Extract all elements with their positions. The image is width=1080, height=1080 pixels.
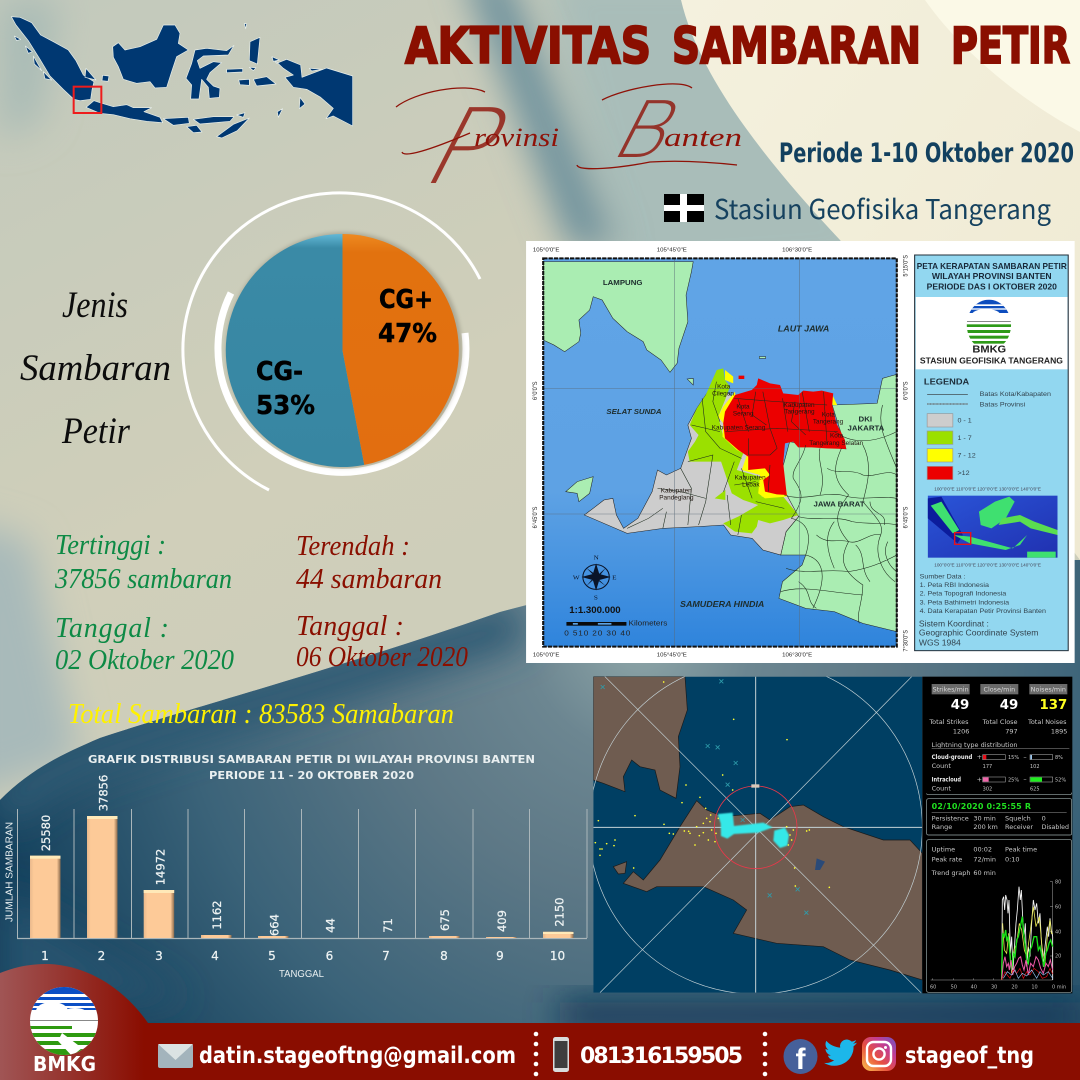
- radar readout panel: 302: [983, 786, 992, 792]
- district labels: Cilegon: [712, 391, 734, 398]
- radar readout panel: Range: [932, 823, 952, 831]
- legend items: >12: [957, 470, 970, 477]
- radar readout panel: 00:02: [973, 845, 992, 853]
- scale bar: [564, 605, 667, 638]
- radar map: [589, 661, 922, 994]
- legend items: 1 - 7: [957, 435, 972, 442]
- heading: Jenis Sambaran Petir: [20, 285, 171, 452]
- axis title: tanggal: TANGGAL: [279, 968, 324, 980]
- title: SAMBARAN: [672, 17, 921, 75]
- radar readout panel: –: [1023, 753, 1027, 761]
- chart title: GRAFIK DISTRIBUSI SAMBARAN PETIR DI WILAYAH PROVINSI BANTEN: [88, 754, 535, 766]
- trend graph: 50: [951, 984, 957, 990]
- map area: [543, 258, 897, 647]
- panel: legend sidebar: BMKG: [972, 344, 1006, 356]
- icon: instagram: [862, 1037, 896, 1071]
- land masses: [593, 677, 922, 980]
- icon: compass rose: [573, 555, 617, 602]
- title: AKTIVITAS: [405, 17, 651, 75]
- radar readout panel: Trend graph: [931, 869, 970, 877]
- radar readout panel: 02/10/2020 0:25:55 R: [932, 802, 1031, 811]
- coordinate labels: 105°0'0"E: [533, 248, 560, 254]
- heading: Jenis Sambaran Petir: Petir: [61, 411, 131, 452]
- radar readout panel: [922, 677, 1072, 993]
- x axis labels: [41, 949, 565, 963]
- radar readout panel: 52%: [1055, 777, 1066, 783]
- radar readout panel: 15%: [1008, 755, 1019, 761]
- panel: density map: [526, 241, 1075, 663]
- legend title: WILAYAH PROVINSI BANTEN: [932, 271, 1052, 281]
- slice: CG- 53%: [226, 234, 364, 467]
- icon: compass rose: E: [612, 575, 617, 581]
- island: Sulawesi: [186, 45, 234, 99]
- icon: BMKG logo: [30, 987, 98, 1056]
- district labels: Serang: [733, 411, 754, 418]
- radar readout panel: 177: [983, 764, 992, 770]
- stats: lowest: 06 Oktober 2020: [296, 642, 468, 673]
- scale bar: 0 510 20 30 40: [564, 629, 631, 638]
- icon: facebook: [784, 1039, 818, 1076]
- bar values: 14972: [154, 849, 168, 885]
- data sources: Sistem Koordinat :: [919, 619, 989, 628]
- x axis labels: 8: [440, 949, 448, 963]
- bar values: 37856: [96, 775, 110, 811]
- island: Java: [86, 101, 163, 123]
- x axis labels: 5: [268, 949, 276, 963]
- trend graph: 20: [1055, 954, 1061, 960]
- stats: highest: Tanggal :: [55, 613, 169, 644]
- trend graph: 40: [971, 984, 977, 990]
- sea and region labels: DKI: [859, 415, 872, 424]
- radar readout panel: Count: [932, 762, 951, 770]
- slice: CG+ 47%: [342, 234, 459, 465]
- social handle: stageof_tng: [905, 1043, 1034, 1069]
- footer bar: [0, 964, 1080, 1080]
- radar readout panel: 0:10: [1005, 856, 1020, 864]
- region: Banten low density: [584, 382, 799, 555]
- bar values: 44: [324, 918, 338, 933]
- icon: station flag: [664, 194, 704, 222]
- trend graph: 60: [1055, 904, 1061, 910]
- slice: CG+ 47%: CG+: [379, 285, 433, 315]
- coordinate labels: 105°0'0"E: [533, 653, 560, 659]
- legend items: LEGENDA: [924, 377, 970, 386]
- sea and region labels: LAMPUNG: [603, 278, 643, 287]
- stats: lowest: Terendah :: [296, 531, 410, 562]
- district labels: [659, 384, 864, 502]
- panel: legend sidebar: STASIUN GEOFISIKA TANGERANG: [920, 356, 1063, 366]
- data sources: [919, 574, 1046, 647]
- subtitle: Provinsi Banten: B: [598, 85, 696, 176]
- island: Kalimantan: [113, 25, 188, 88]
- subtitle: Provinsi Banten: rovinsi: [474, 123, 559, 152]
- inset map: 100°0'0"E 110°0'0"E 120°0'0"E 130°0'0"E 140°0'0"E: [934, 562, 1041, 567]
- decorative rings: [183, 193, 480, 490]
- icon: compass rose: W: [573, 575, 580, 581]
- district labels: Kota: [717, 384, 731, 390]
- radar readout panel: +: [977, 775, 982, 783]
- legend items: 0 - 1: [957, 418, 972, 425]
- pie chart: [183, 193, 480, 490]
- radar readout panel: Count: [932, 784, 951, 792]
- data sources: 3. Peta Bathimetri Indonesia: [920, 600, 1009, 607]
- radar readout panel: Total Noises: [1027, 718, 1067, 726]
- coordinate labels: 7°30'0"S: [903, 630, 910, 652]
- radar readout panel: 8%: [1055, 755, 1063, 761]
- heading: Jenis Sambaran Petir: Jenis: [62, 285, 128, 326]
- slice: CG- 53%: 53%: [256, 391, 315, 421]
- x axis labels: 6: [326, 949, 333, 963]
- coordinate labels: 6°0'0"S: [903, 381, 910, 400]
- title: [405, 17, 1070, 75]
- trend graph: 60: [930, 984, 936, 990]
- chart title: PERIODE 11 - 20 OKTOBER 2020: [209, 770, 414, 782]
- strike cluster: intracloud: [718, 813, 789, 848]
- bar values: 675: [438, 909, 452, 931]
- district labels: Kota: [830, 433, 844, 440]
- trend graph: 80: [1055, 879, 1061, 885]
- bar values: 409: [495, 910, 509, 932]
- radar readout panel: Peak time: [1005, 845, 1037, 853]
- icon: BMKG logo small: [966, 300, 1011, 344]
- district labels: Kota: [822, 412, 836, 418]
- radar readout panel: 625: [1030, 786, 1040, 792]
- district labels: Tangerang: [813, 419, 844, 426]
- slice: CG+ 47%: 47%: [378, 319, 437, 349]
- coordinate labels: 6°0'0"S: [533, 381, 539, 400]
- radar readout panel: 102: [1030, 764, 1040, 770]
- legend title: PERIODE DAS I OKTOBER 2020: [927, 282, 1057, 291]
- legend items: Batas Kota/Kabapaten: [980, 391, 1051, 398]
- bar values: [39, 775, 566, 936]
- islands: [566, 357, 766, 502]
- radar readout panel: 49: [951, 698, 969, 713]
- radar readout panel: +: [977, 753, 982, 761]
- x axis labels: 7: [382, 949, 390, 963]
- grid: [543, 258, 897, 647]
- legend items: Batas Provinsi: [980, 402, 1026, 409]
- legend title: [917, 261, 1067, 291]
- district labels: Kabupaten: [735, 475, 766, 481]
- stats: highest: 02 Oktober 2020: [55, 645, 234, 676]
- bar values: 1162: [210, 900, 224, 930]
- icon: Indonesia locator map: [11, 17, 353, 138]
- stats: highest: [54, 530, 234, 676]
- phone number: 081316159505: [580, 1044, 743, 1069]
- chart title: [88, 754, 535, 782]
- district labels: Kabupaten: [784, 402, 815, 409]
- sea and region labels: LAUT JAWA: [778, 324, 829, 334]
- x axis labels: 2: [98, 949, 105, 963]
- email: datin.stageoftng@gmail.com: [199, 1043, 516, 1069]
- legend items: 7 - 12: [957, 453, 976, 459]
- x axis labels: 4: [211, 949, 219, 963]
- data sources: 4. Data Kerapatan Petir Provinsi Banten: [920, 608, 1046, 615]
- district labels: Kota: [736, 404, 750, 410]
- trend graph: 10: [1031, 984, 1038, 990]
- district labels: Kabupaten Serang: [712, 425, 766, 432]
- inset map: 100°0'0"E 110°0'0"E 120°0'0"E 130°0'0"E 140°0'0"E: [934, 486, 1041, 491]
- radar readout panel: 137: [1040, 698, 1067, 713]
- icon: envelope: [158, 1044, 193, 1068]
- slice: CG- 53%: CG-: [256, 357, 303, 387]
- island: Sumatra: [11, 17, 94, 101]
- region: density 7-12: [718, 370, 837, 498]
- scale bar: Kilometers: [629, 619, 667, 628]
- bars: [30, 816, 574, 938]
- island: Papua: [272, 57, 353, 126]
- region: Lampung: [543, 262, 693, 372]
- trend graph: 30: [991, 984, 997, 990]
- radar readout panel: Peak rate: [932, 856, 962, 864]
- separator dots: [534, 1032, 767, 1076]
- radar readout panel: Lightning type distribution: [932, 741, 1018, 749]
- bar values: 71: [381, 918, 395, 933]
- type distribution bars: [983, 755, 1053, 782]
- subtitle: Provinsi Banten: anten: [664, 123, 742, 152]
- radar readout panel: Persistence: [932, 814, 969, 822]
- radar readout panel: 25%: [1008, 777, 1019, 783]
- radar readout panel: Noises/min: [1031, 686, 1066, 694]
- radar readout panel: Cloud-ground: [932, 753, 973, 761]
- radar readout panel: Total Close: [982, 718, 1018, 726]
- radar readout panel: 72/min: [973, 856, 996, 864]
- region: Jawa Barat: [779, 374, 897, 632]
- sea and region labels: JAWA BARAT: [814, 500, 865, 509]
- x axis labels: 3: [155, 949, 163, 963]
- heading: Jenis Sambaran Petir: Sambaran: [20, 348, 171, 389]
- radar readout panel: 30 min: [973, 814, 996, 822]
- radar readout panel: 1206: [953, 728, 969, 736]
- sea and region labels: SELAT SUNDA: [606, 407, 662, 416]
- panel: legend sidebar: [915, 255, 1068, 651]
- stats: highest: 37856 sambaran: [54, 564, 232, 595]
- scale bar: 1:1.300.000: [569, 605, 621, 615]
- strike points: cloud-ground: [594, 681, 830, 888]
- district labels: Tangerang Selatan: [809, 440, 864, 447]
- panel: lightning radar: [589, 661, 1072, 994]
- data sources: Geographic Coordinate System: [919, 628, 1038, 638]
- district labels: Lebak: [742, 482, 761, 489]
- gridlines: [17, 809, 587, 938]
- stats: lowest: [296, 531, 468, 673]
- legend title: PETA KERAPATAN SAMBARAN PETIR: [917, 261, 1067, 271]
- data sources: 2. Peta Topografi Indonesia: [920, 591, 1006, 598]
- stats: lowest: 44 sambaran: [296, 564, 442, 595]
- data sources: WGS 1984: [919, 638, 961, 647]
- sea and region labels: JAKARTA: [847, 424, 885, 432]
- axis title: jumlah sambaran: JUMLAH SAMBARAN: [4, 822, 16, 922]
- sea and region labels: [603, 278, 885, 609]
- coordinate labels: 6°45'0"S: [533, 507, 539, 528]
- coordinate labels: 106°30'0"E: [782, 653, 812, 659]
- x axis labels: 1: [41, 949, 49, 963]
- radar readout panel: Uptime: [932, 845, 955, 853]
- radar readout panel: 49: [1000, 698, 1018, 713]
- bar values: 2150: [552, 897, 566, 927]
- icon: facebook: f: [796, 1043, 806, 1076]
- radar readout panel: 60 min: [973, 869, 996, 877]
- marker: Banten red box: [74, 87, 101, 113]
- radar readout panel: Receiver: [1005, 823, 1033, 831]
- radar readout panel: 1895: [1051, 728, 1067, 736]
- coordinate labels: 5°15'0"S: [903, 255, 910, 277]
- trend graph: 0 min: [1052, 984, 1066, 990]
- coordinate labels: 105°45'0"E: [657, 653, 687, 659]
- coordinate labels: 106°30'0"E: [782, 248, 812, 254]
- radar readout panel: Strikes/min: [933, 686, 969, 694]
- radar readout panel: Close/min: [983, 686, 1015, 694]
- sea and region labels: SAMUDERA HINDIA: [680, 599, 764, 609]
- subtitle: Provinsi Banten: P: [405, 87, 530, 208]
- range rings and axes: [589, 661, 922, 994]
- district labels: Pandeglang: [659, 495, 694, 502]
- legend items: [924, 377, 1051, 480]
- radar readout panel: 200 km: [973, 823, 998, 831]
- coordinate labels: 105°45'0"E: [657, 248, 687, 254]
- district labels: Tangerang: [784, 409, 815, 416]
- radar readout panel: Total Strikes: [928, 718, 969, 726]
- trend graph: 40: [1055, 929, 1061, 935]
- radar readout panel: 0: [1042, 814, 1046, 822]
- trend graph: 20: [1011, 984, 1018, 990]
- bar values: 25580: [39, 815, 53, 851]
- icon: compass rose: S: [594, 595, 598, 602]
- radar readout panel: Disabled: [1042, 823, 1069, 831]
- district labels: Kabupaten: [661, 488, 692, 494]
- stats: highest: Tertinggi :: [55, 530, 166, 561]
- radar readout panel: Intracloud: [932, 775, 961, 783]
- x axis labels: 9: [496, 949, 504, 963]
- islands: Nusa Tenggara and Maluku: [14, 23, 323, 138]
- radar readout panel: 797: [1005, 728, 1018, 736]
- cross markers: [601, 679, 808, 915]
- region: density 1-7: [688, 368, 798, 533]
- icon: phone: [553, 1037, 569, 1072]
- radar readout panel: –: [1023, 775, 1027, 783]
- icon: twitter: [824, 1040, 857, 1066]
- region: density above 12: [723, 376, 846, 495]
- x axis labels: 10: [550, 949, 565, 963]
- bar chart: [4, 754, 587, 980]
- data sources: 1. Peta RBI Indonesia: [920, 582, 989, 589]
- radar readout panel: Squelch: [1005, 814, 1031, 822]
- coordinate labels: 6°45'0"S: [903, 507, 910, 528]
- icon: compass rose: N: [594, 555, 599, 562]
- stats: lowest: Tanggal :: [296, 611, 404, 642]
- bar values: 664: [268, 914, 282, 936]
- station label: Stasiun Geofisika Tangerang: [714, 188, 1051, 227]
- coordinate labels: [533, 248, 910, 659]
- inset map: [928, 486, 1057, 567]
- subtitle: Provinsi Banten: [396, 84, 742, 208]
- district boundaries: [627, 382, 897, 623]
- footer bar: BMKG: [33, 1052, 96, 1076]
- data sources: Sumber Data :: [920, 574, 966, 580]
- trend graph: [930, 879, 1066, 990]
- stats: total: Total Sambaran : 83583 Samabaran: [68, 699, 454, 730]
